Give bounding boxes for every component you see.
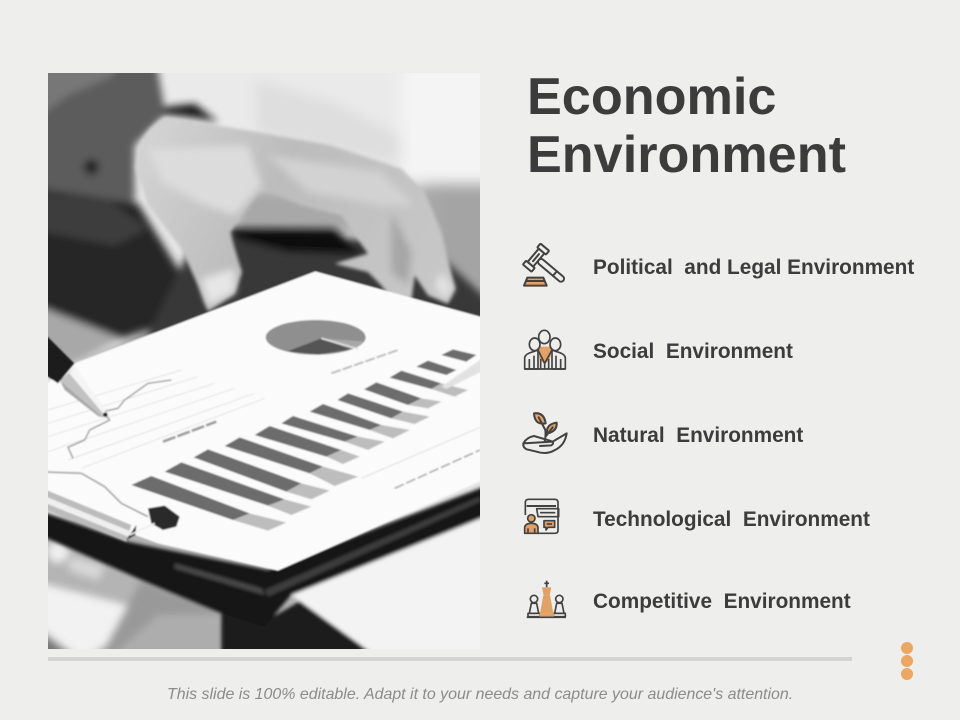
footer text: This slide is 100% editable. Adapt it to your needs and capture your audience's attention. (167, 686, 793, 703)
lower scene: table reflection, folder, loose sheet (28, 480, 501, 660)
label: technological: Technological Environment (593, 508, 870, 531)
icon: plant in hand (522, 412, 568, 454)
label: political: Political and Legal Environment (593, 256, 914, 279)
pagination dots (901, 642, 913, 680)
label: natural: Natural Environment (593, 424, 803, 447)
pie chart (266, 320, 366, 355)
clip (38, 472, 180, 542)
icon: chess pieces (526, 580, 566, 618)
icon: presentation screen with presenter (524, 498, 560, 534)
paper with charts (38, 271, 498, 571)
label: social: Social Environment (593, 340, 793, 363)
icon: gavel (522, 242, 565, 287)
bar chart rows (131, 349, 476, 531)
divider bar (48, 657, 852, 661)
label: competitive: Competitive Environment (593, 590, 851, 613)
title: Environment (527, 126, 846, 184)
title: Economic (527, 68, 776, 126)
pen right (441, 353, 498, 389)
icon: group of people (524, 330, 566, 370)
pen left (38, 327, 108, 417)
photo: hand reviewing financial charts (48, 73, 480, 649)
upper scene: shirt, sleeve, table (28, 52, 503, 365)
hand (135, 117, 455, 311)
title (527, 68, 846, 184)
line chart (48, 370, 265, 468)
